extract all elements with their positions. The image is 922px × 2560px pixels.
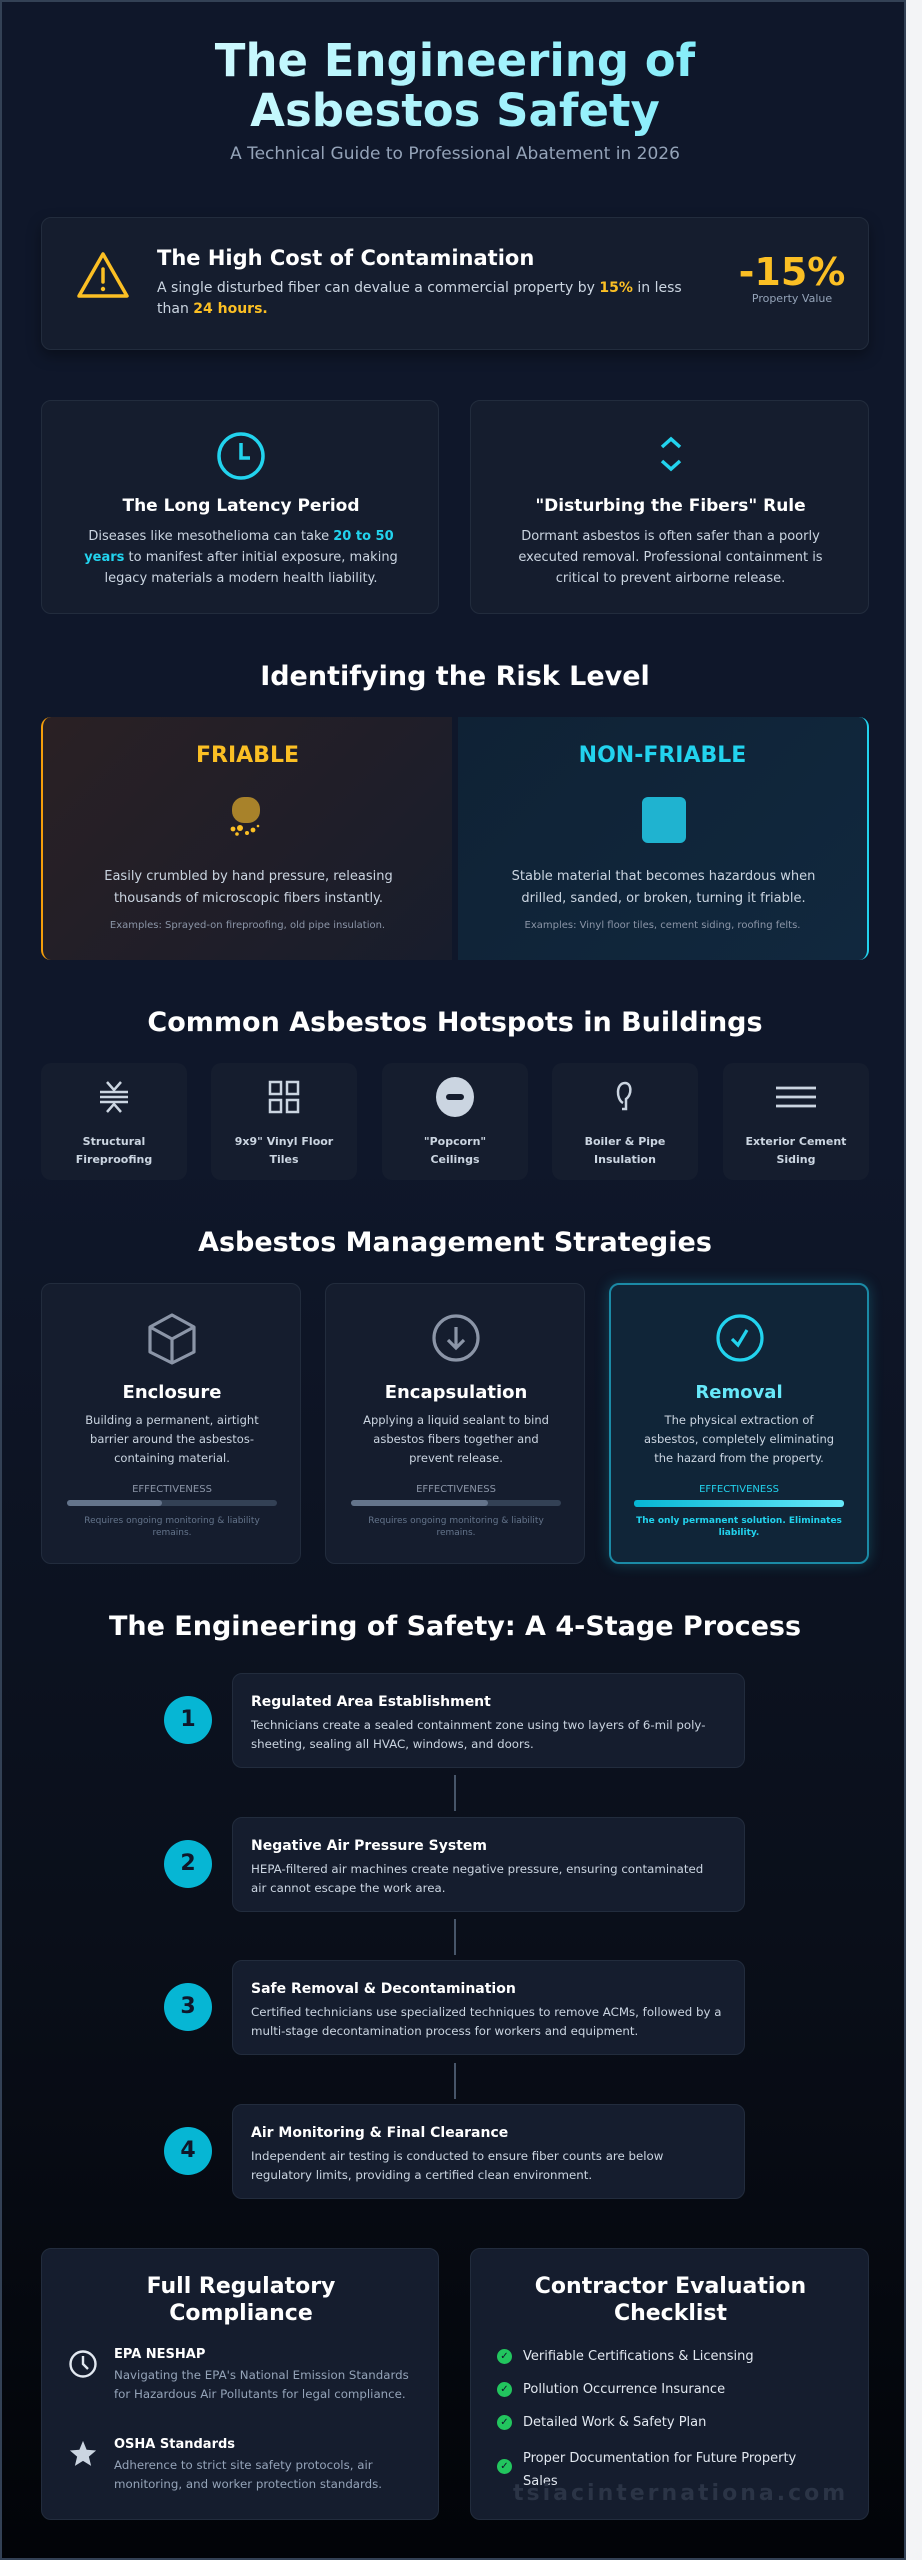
strategy: encapsulation: Applying a liquid sealant to bind asbestos fibers together and prevent release. bbox=[363, 1413, 549, 1465]
strategy: removal: EFFECTIVENESS bbox=[699, 1484, 779, 1495]
icon: cube bbox=[148, 1313, 196, 1365]
non-friable side: Stable material that becomes hazardous when drilled, sanded, or broken, turning it friable. bbox=[512, 869, 815, 906]
panel: regulatory compliance: Navigating the EPA's National Emission Standards for Hazardous Air Pollutants for legal compliance. bbox=[114, 2368, 409, 2401]
step 3: Certified technicians use specialized techniques to remove ACMs, followed by a multi-stage decontamination process for workers and equipment. bbox=[251, 2005, 721, 2038]
text: Dormant asbestos is often safer than a poorly executed removal. Professional containment is critical to prevent airborne release. bbox=[518, 529, 823, 586]
panel: high cost alert bbox=[41, 217, 869, 350]
panel: contractor checklist: Contractor Evaluation bbox=[535, 2274, 806, 2299]
strategy: encapsulation: Requires ongoing monitoring & liability remains. bbox=[368, 1516, 544, 1538]
step 4: Air Monitoring & Final Clearance bbox=[251, 2125, 508, 2141]
checklist items: Proper Documentation for Future Property Sales bbox=[523, 2451, 796, 2489]
panel: regulatory compliance: OSHA Standards bbox=[114, 2437, 235, 2452]
step 3 bbox=[164, 1960, 745, 2055]
step 1: Technicians create a sealed containment zone using two layers of 6-mil poly-sheeting, sealing all HVAC, windows, and doors. bbox=[251, 1718, 705, 1751]
icon: star bbox=[70, 2441, 96, 2466]
tile: vinyl floor tiles: Tiles bbox=[269, 1153, 299, 1166]
step 1: 1 bbox=[180, 1707, 196, 1732]
tile: boiler & pipe bbox=[552, 1063, 698, 1180]
subtitle: A Technical Guide to Professional Abatement in 2026 bbox=[230, 144, 680, 164]
panel: long latency bbox=[41, 400, 439, 614]
text: Diseases like mesothelioma can take 20 to 50 years to manifest after initial exposure, making legacy materials a modern health liability. bbox=[84, 529, 398, 586]
checklist items: Verifiable Certifications & Licensing bbox=[523, 2349, 754, 2364]
strategy: removal: The only permanent solution. Eliminates liability. bbox=[636, 1516, 842, 1538]
friable side: Examples: Sprayed-on fireproofing, old pipe insulation. bbox=[110, 920, 385, 931]
alert text: A single disturbed fiber can devalue a commercial property by 15% in less than 24 hours. bbox=[157, 280, 682, 317]
icon: solid tile bbox=[642, 797, 686, 843]
strategy: encapsulation bbox=[325, 1283, 585, 1564]
strategy: encapsulation: Encapsulation bbox=[385, 1382, 527, 1403]
tile: popcorn ceilings bbox=[382, 1063, 528, 1180]
panel: regulatory compliance: Compliance bbox=[169, 2301, 313, 2326]
friable side bbox=[41, 717, 452, 960]
strategy: enclosure: EFFECTIVENESS bbox=[132, 1484, 212, 1495]
panel: contractor checklist bbox=[470, 2248, 869, 2520]
checklist items: ✓ bbox=[500, 2461, 509, 2472]
checklist items: ✓ bbox=[500, 2417, 509, 2428]
tile: structural fireproofing: Structural bbox=[83, 1135, 145, 1148]
title: Asbestos Safety bbox=[250, 84, 660, 137]
strategy: enclosure: Building a permanent, airtight barrier around the asbestos-containing material. bbox=[85, 1413, 259, 1465]
tile: cement siding bbox=[723, 1063, 869, 1180]
step 3: Safe Removal & Decontamination bbox=[251, 1981, 516, 1997]
tile: popcorn ceilings: Ceilings bbox=[430, 1153, 480, 1166]
bar 45% bbox=[67, 1500, 277, 1506]
panel: regulatory compliance: EPA NESHAP bbox=[114, 2347, 205, 2362]
panel: disturbing fibers bbox=[470, 400, 869, 614]
title: The Engineering of bbox=[215, 34, 695, 87]
panel: contractor checklist: Checklist bbox=[614, 2301, 727, 2326]
heading: 4-stage process: The Engineering of Safety: A 4-Stage Process bbox=[109, 1611, 801, 1642]
tile: vinyl floor tiles bbox=[211, 1063, 357, 1180]
icon: clock bbox=[217, 432, 265, 480]
strategy: enclosure: Enclosure bbox=[123, 1382, 221, 1403]
tile: boiler & pipe: Insulation bbox=[594, 1153, 656, 1166]
heading: management strategies: Asbestos Management Strategies bbox=[198, 1227, 712, 1258]
step 2: HEPA-filtered air machines create negative pressure, ensuring contaminated air cannot escape the work area. bbox=[251, 1862, 703, 1895]
tile: cement siding: Siding bbox=[776, 1153, 816, 1166]
icon: crumbling bbox=[230, 797, 260, 836]
friable side: Easily crumbled by hand pressure, releasing thousands of microscopic fibers instantly. bbox=[104, 869, 393, 906]
tile: structural fireproofing bbox=[41, 1063, 187, 1180]
hotspot tiles bbox=[76, 1077, 846, 1166]
non-friable side bbox=[458, 717, 869, 960]
checklist items: Detailed Work & Safety Plan bbox=[523, 2415, 706, 2430]
strategy: removal: The physical extraction of asbestos, completely eliminating the hazard from the property. bbox=[644, 1413, 834, 1465]
title bbox=[2, 36, 908, 136]
bar 65% bbox=[351, 1500, 561, 1506]
checklist items: ✓ bbox=[500, 2351, 509, 2362]
friable side: FRIABLE bbox=[196, 743, 299, 768]
panel: regulatory compliance: Adherence to strict site safety protocols, air monitoring, and worker protection standards. bbox=[114, 2458, 382, 2491]
heading: hotspots: Common Asbestos Hotspots in Buildings bbox=[147, 1007, 763, 1038]
strategy: encapsulation: EFFECTIVENESS bbox=[416, 1484, 496, 1495]
step 4 bbox=[164, 2104, 745, 2199]
step 1: Regulated Area Establishment bbox=[251, 1694, 491, 1710]
strategy: removal bbox=[609, 1283, 869, 1564]
icon: down arrow circle bbox=[432, 1314, 480, 1362]
tile: structural fireproofing: Fireproofing bbox=[76, 1153, 152, 1166]
icon: chevrons bbox=[660, 436, 682, 472]
strategy: enclosure bbox=[41, 1283, 301, 1564]
panel: regulatory compliance: Full Regulatory bbox=[147, 2274, 335, 2299]
icon: check circle bbox=[716, 1314, 764, 1362]
panel: risk comparison bbox=[41, 717, 869, 960]
step 4: 4 bbox=[180, 2138, 196, 2163]
icon: warning bbox=[77, 252, 129, 298]
step 2 bbox=[164, 1817, 745, 1912]
step 3: 3 bbox=[180, 1994, 196, 2019]
panel: regulatory compliance bbox=[41, 2248, 439, 2520]
step 4: Independent air testing is conducted to ensure fiber counts are below regulatory limits, providing a certified clean environment. bbox=[251, 2149, 663, 2182]
bar 100% bbox=[634, 1500, 844, 1507]
checklist items bbox=[497, 2349, 796, 2489]
non-friable side: Examples: Vinyl floor tiles, cement siding, roofing felts. bbox=[525, 920, 800, 931]
stat: -15%: -15% bbox=[739, 250, 845, 294]
tile: popcorn ceilings: "Popcorn" bbox=[424, 1135, 486, 1148]
watermark: tsiacinternationa.com bbox=[513, 2481, 848, 2506]
strategy: enclosure: Requires ongoing monitoring & liability remains. bbox=[84, 1516, 260, 1538]
alert heading: The High Cost of Contamination bbox=[157, 246, 534, 270]
step 2: Negative Air Pressure System bbox=[251, 1838, 487, 1854]
heading: risk level: Identifying the Risk Level bbox=[260, 661, 650, 692]
tile: cement siding: Exterior Cement bbox=[746, 1135, 846, 1148]
heading: The Long Latency Period bbox=[122, 496, 360, 516]
non-friable side: NON-FRIABLE bbox=[579, 743, 746, 768]
checklist items: Pollution Occurrence Insurance bbox=[523, 2382, 725, 2397]
tile: vinyl floor tiles: 9x9" Vinyl Floor bbox=[235, 1135, 333, 1148]
stat: -15%: Property Value bbox=[752, 292, 832, 305]
checklist items: ✓ bbox=[500, 2384, 509, 2395]
strategy: removal: Removal bbox=[695, 1382, 783, 1403]
icon: clock bbox=[69, 2350, 97, 2378]
step 2: 2 bbox=[180, 1851, 196, 1876]
heading: "Disturbing the Fibers" Rule bbox=[535, 496, 806, 516]
step 1 bbox=[164, 1673, 745, 1768]
tile: boiler & pipe: Boiler & Pipe bbox=[585, 1135, 665, 1148]
